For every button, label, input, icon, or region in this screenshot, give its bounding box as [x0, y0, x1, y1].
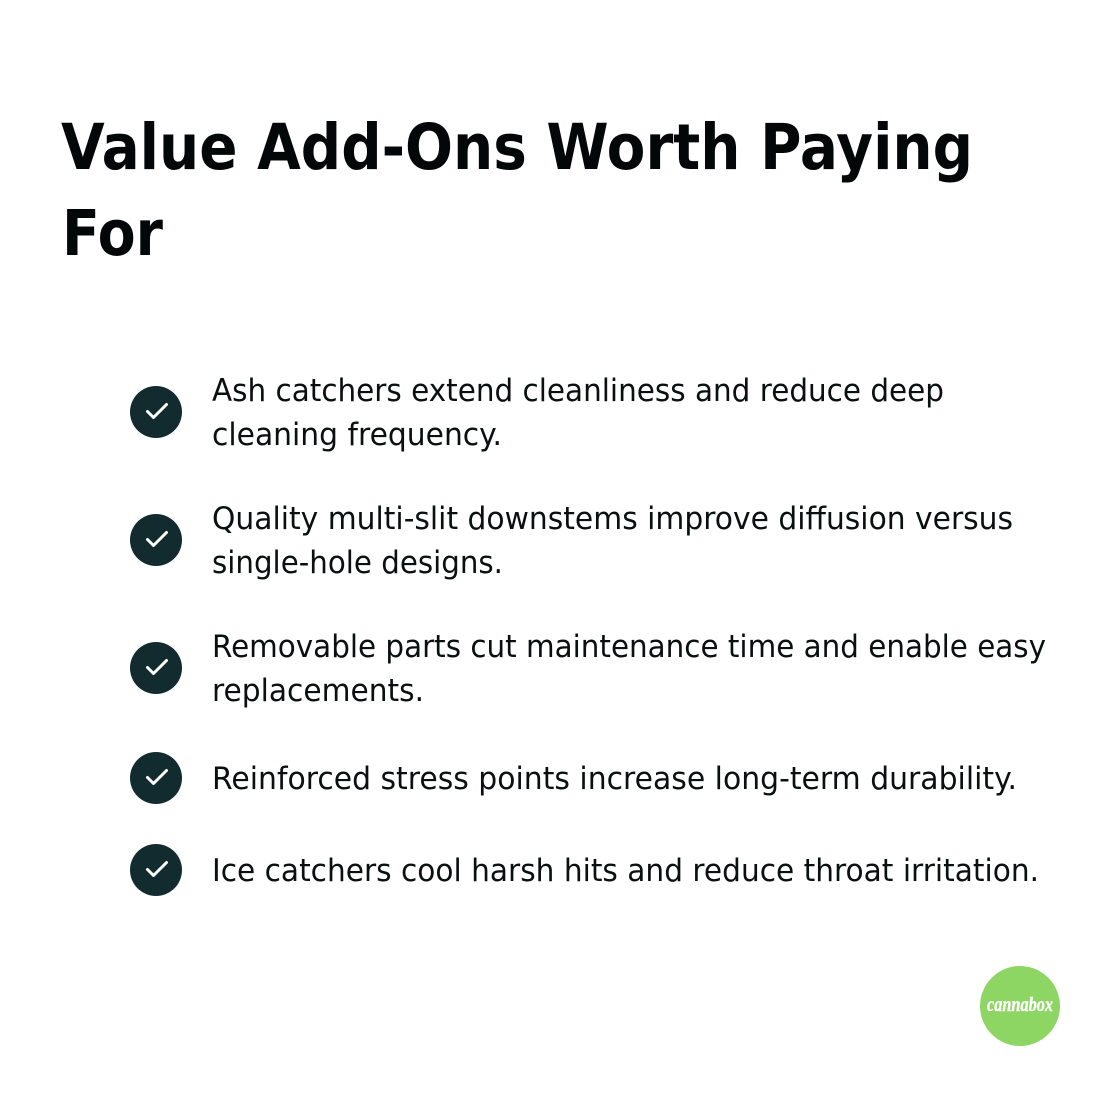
- item: ice catchers: [130, 844, 1039, 896]
- title: For: [62, 197, 163, 270]
- logo: cannabox badge: [980, 966, 1060, 1046]
- item: ash catchers: [130, 373, 944, 453]
- item: ash catchers: Ash catchers extend cleanliness and reduce deep: [212, 373, 944, 409]
- logo: cannabox badge: cannabox: [987, 994, 1053, 1016]
- item: multi-slit downstems: Quality multi-slit downstems improve diffusion versus: [212, 501, 1013, 537]
- item: ice catchers: Ice catchers cool harsh hits and reduce throat irritation.: [212, 853, 1039, 889]
- item: removable parts: Removable parts cut maintenance time and enable easy: [212, 629, 1046, 665]
- item: reinforced stress points: Reinforced stress points increase long-term durability.: [212, 761, 1017, 797]
- item: removable parts: replacements.: [212, 673, 424, 709]
- checklist: [130, 373, 1046, 896]
- item: removable parts: [130, 629, 1046, 709]
- item: reinforced stress points: [130, 752, 1017, 804]
- title: [61, 111, 973, 270]
- item: ash catchers: cleaning frequency.: [212, 417, 502, 453]
- title: Value Add-Ons Worth Paying: [61, 111, 973, 184]
- item: multi-slit downstems: single-hole designs.: [212, 545, 503, 581]
- item: multi-slit downstems: [130, 501, 1013, 581]
